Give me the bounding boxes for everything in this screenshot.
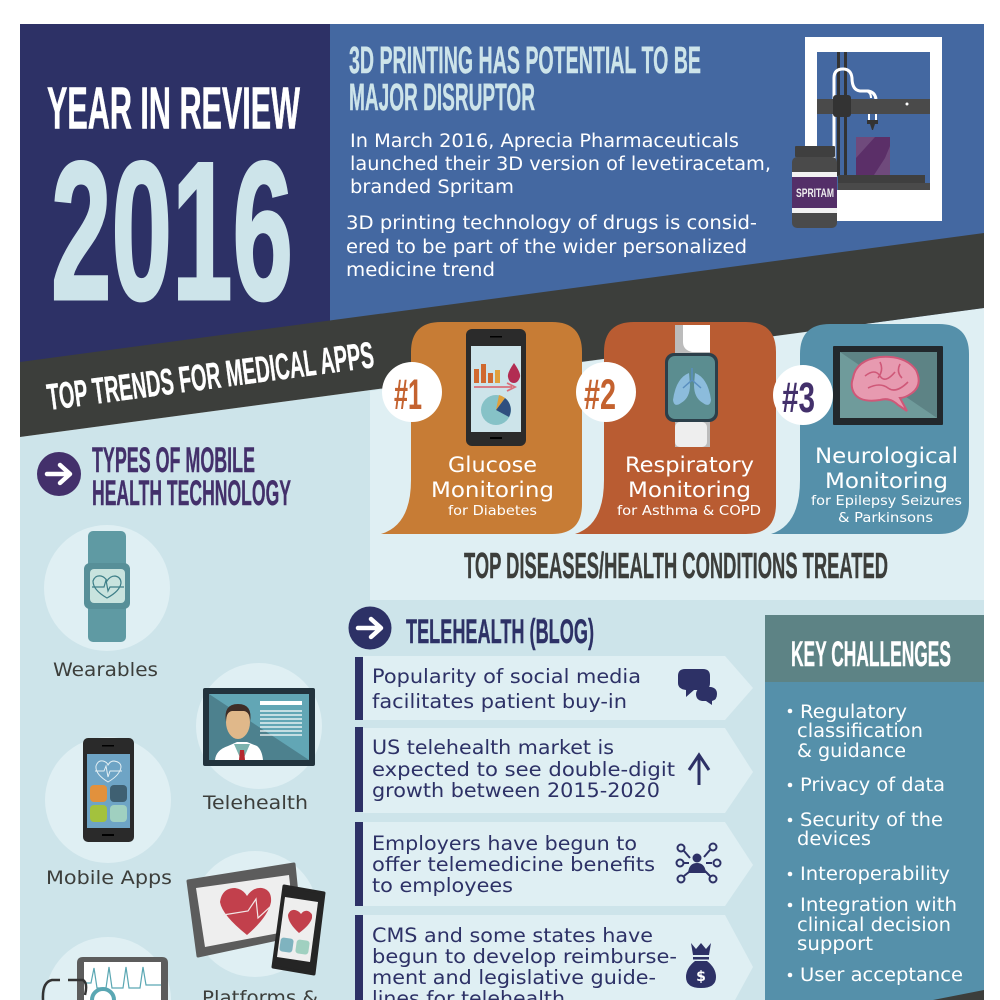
row: market growth: growth between 2015-2020	[372, 779, 660, 802]
heading: types of mobile health technology: HEALTH TECHNOLOGY	[92, 474, 291, 513]
list: challenges: Interoperability	[800, 864, 950, 885]
text: respiratory monitoring: Monitoring	[628, 478, 751, 503]
text block: personalized medicine: 3D printing technology of drugs is consid-	[346, 213, 757, 234]
icon: 3D printer and bottle: SPRITAM	[796, 188, 834, 200]
list: challenges: support	[797, 934, 873, 955]
heading: types of mobile health technology	[37, 441, 291, 513]
text: glucose monitoring: for Diabetes	[448, 503, 537, 519]
text: neurological monitoring: & Parkinsons	[838, 510, 933, 526]
row: employers: offer telemedicine benefits	[372, 853, 655, 876]
text: glucose monitoring: Monitoring	[431, 478, 554, 503]
list: challenges: devices	[797, 829, 871, 850]
text: neurological monitoring: Monitoring	[825, 469, 948, 494]
text: respiratory monitoring	[617, 453, 761, 519]
title: year in review: YEAR IN REVIEW	[47, 76, 300, 142]
banner: top trends for medical apps: TOP TRENDS FOR MEDICAL APPS	[45, 334, 376, 418]
icon: 3D printer and bottle	[792, 37, 942, 228]
text: respiratory monitoring: for Asthma & COPD	[617, 503, 761, 519]
badge: #2	[576, 362, 636, 422]
text block: personalized medicine: ered to be part of the wider personalized	[346, 237, 747, 258]
list: challenges: Integration with	[800, 895, 957, 916]
text block: personalized medicine	[346, 213, 757, 281]
row: employers: Employers have begun to	[372, 832, 637, 855]
list: challenges: clinical decision	[797, 915, 951, 936]
text: glucose monitoring	[431, 453, 554, 519]
item: diagnostic tablet	[43, 937, 171, 1000]
text block: Aprecia launch: launched their 3D version of levetiracetam,	[350, 154, 771, 175]
badge: #3	[773, 365, 833, 425]
card: glucose monitoring	[381, 322, 582, 534]
list: challenges: & guidance	[797, 741, 906, 762]
icon: money bag	[686, 943, 716, 988]
item: wearables: Wearables	[53, 659, 158, 681]
item: telehealth: Telehealth	[202, 792, 308, 814]
row: social media	[355, 656, 753, 720]
row: market growth: US telehealth market is	[372, 736, 614, 759]
text: respiratory monitoring: Respiratory	[625, 453, 754, 478]
card: respiratory monitoring	[575, 322, 776, 534]
panel: left mobile health background	[20, 308, 984, 1000]
heading: telehealth blog	[348, 606, 594, 651]
row: employers	[355, 822, 753, 906]
text: neurological monitoring: Neurological	[815, 444, 958, 469]
text block: Aprecia launch	[350, 131, 771, 198]
icon: chat bubbles	[678, 669, 717, 705]
list: challenges	[788, 702, 963, 986]
item: platforms	[188, 851, 324, 1000]
text: glucose monitoring: Glucose	[448, 453, 537, 478]
icon: up arrow	[689, 755, 709, 785]
banner: top trends for medical apps	[20, 233, 984, 437]
list: challenges: Security of the	[800, 810, 943, 831]
badge: #1	[382, 362, 442, 422]
heading: telehealth blog: TELEHEALTH (BLOG)	[406, 613, 594, 651]
panel: key challenges	[765, 615, 984, 1000]
list: challenges: User acceptance	[800, 965, 963, 986]
row: market growth	[355, 727, 753, 813]
row: social media: Popularity of social media	[372, 665, 641, 688]
item: mobile apps	[45, 737, 172, 889]
list: challenges: Regulatory	[800, 702, 907, 723]
row: social media: facilitates patient buy-in	[372, 690, 627, 713]
item: wearables	[44, 525, 170, 681]
row: reimbursement: CMS and some states have	[372, 924, 653, 947]
title: 2016: 2016	[51, 121, 293, 341]
badge: #1: #1	[394, 371, 422, 419]
row: reimbursement: begun to develop reimburse-	[372, 945, 677, 968]
item: mobile apps: Mobile Apps	[46, 867, 172, 889]
icon: smartwatch with lungs	[665, 325, 718, 447]
icon: network	[676, 844, 720, 882]
text block: Aprecia launch: branded Spritam	[350, 177, 514, 198]
panel: top diseases background	[370, 308, 984, 600]
heading: types of mobile health technology: TYPES OF MOBILE	[92, 441, 255, 480]
list: challenges: classification	[797, 721, 923, 742]
badge: #2: #2	[584, 371, 616, 419]
badge: #3: #3	[782, 374, 815, 422]
panel: 3D printing	[330, 24, 984, 324]
row: market growth: expected to see double-digit	[372, 758, 675, 781]
icon: phone with glucose chart	[466, 329, 526, 446]
card: neurological monitoring	[771, 324, 969, 534]
text block: personalized medicine: medicine trend	[346, 260, 495, 281]
panel: year in review header	[20, 24, 330, 364]
text: neurological monitoring: for Epilepsy Seizures	[811, 493, 962, 509]
heading: key challenges	[765, 615, 984, 682]
heading: 3D printing: MAJOR DISRUPTOR	[349, 77, 535, 119]
icon: money bag: $	[696, 969, 706, 985]
list: challenges: Privacy of data	[800, 775, 945, 796]
icon: monitor with brain	[833, 346, 943, 425]
text: neurological monitoring	[811, 444, 962, 526]
text block: Aprecia launch: In March 2016, Aprecia Pharmaceuticals	[350, 131, 739, 152]
item: telehealth	[196, 663, 322, 814]
row: reimbursement	[355, 915, 753, 1000]
heading: 3D printing	[349, 40, 701, 119]
dark corner band	[933, 990, 984, 1000]
row: employers: to employees	[372, 874, 513, 897]
row: reimbursement: ment and legislative guide-	[372, 966, 656, 989]
